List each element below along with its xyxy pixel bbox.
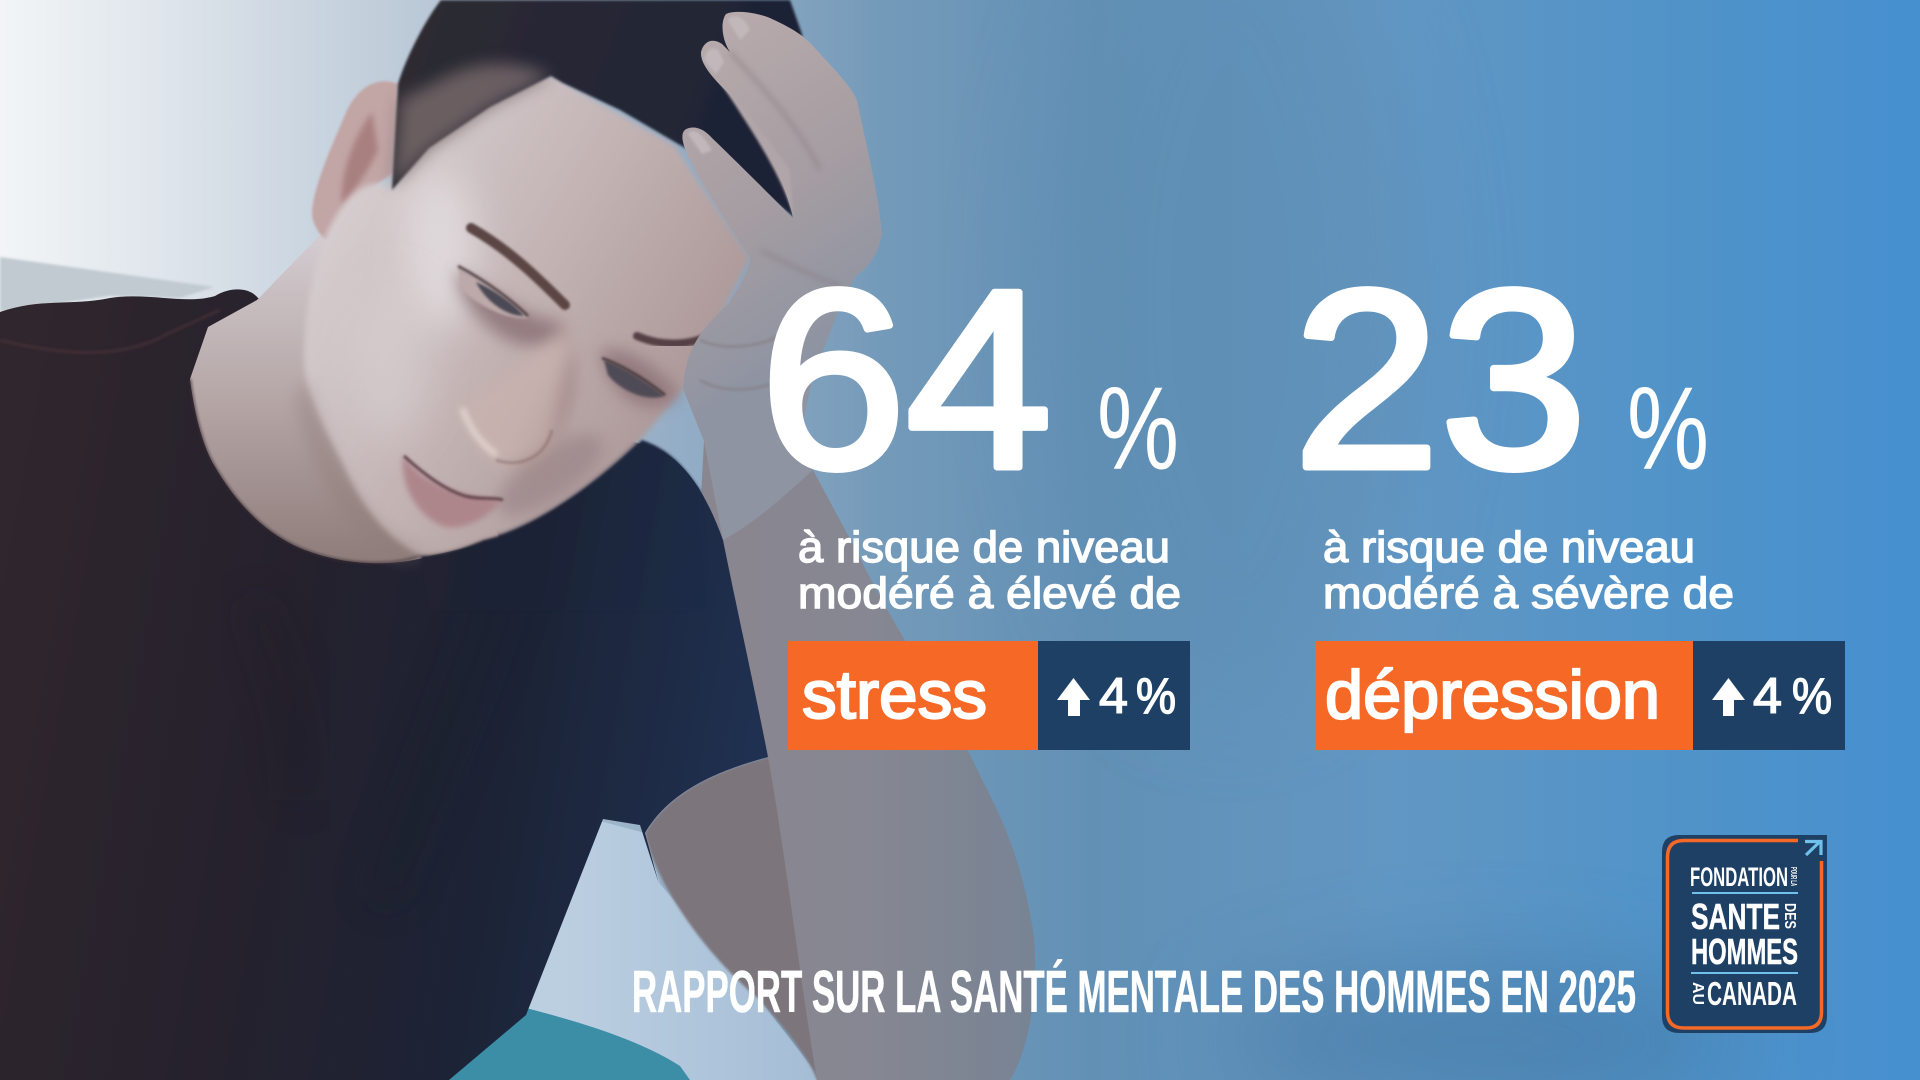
stat: 23 % depression (1293, 237, 1845, 750)
logo: Fondation pour la santé des hommes au Canada: POUR LA (1789, 867, 1798, 886)
t-shirt (0, 289, 768, 1080)
hair (392, 0, 802, 222)
logo: Fondation pour la santé des hommes au Canada: CANADA (1707, 975, 1797, 1012)
logo: Fondation pour la santé des hommes au Canada (1662, 835, 1827, 1033)
nose highlight (462, 322, 568, 464)
teal object (449, 1008, 690, 1080)
logo: Fondation pour la santé des hommes au Canada: FONDATION (1690, 862, 1788, 892)
logo: Fondation pour la santé des hommes au Canada: DES (1781, 903, 1798, 929)
upper arm (645, 757, 870, 1080)
figure 64: 64 (760, 237, 1052, 521)
eyes (458, 268, 528, 318)
eyebrows (471, 228, 565, 305)
logo: Fondation pour la santé des hommes au Canada: SANTE (1691, 896, 1780, 937)
stat: 64 % stress (760, 237, 1190, 750)
neck (190, 234, 500, 563)
hand (682, 12, 882, 540)
window gap beside the torso (449, 820, 822, 1080)
description: à risque de niveau (1323, 523, 1695, 572)
lips (403, 455, 502, 527)
stress increase (1038, 641, 1190, 750)
face (304, 76, 750, 555)
stress label (788, 641, 1038, 750)
photo: man holding his head (0, 0, 1035, 1080)
stress increase: % (1136, 668, 1176, 724)
description: modéré à élevé de (798, 569, 1181, 618)
description: à risque de niveau (798, 523, 1170, 572)
logo: Fondation pour la santé des hommes au Canada: AU (1689, 982, 1706, 1005)
shoulder over the jaw (421, 440, 710, 610)
eye sockets and nose shadow (455, 270, 566, 346)
skin at lower left (0, 1064, 105, 1080)
stress increase: 4 (1099, 668, 1128, 724)
ear (312, 81, 398, 240)
description: modéré à sévère de (1323, 569, 1734, 618)
depression label (1315, 641, 1693, 750)
figure 23: 23 (1293, 237, 1587, 521)
stress label: stress (802, 657, 987, 733)
fingernails (688, 16, 750, 154)
depression increase: 4 (1753, 668, 1782, 724)
forearm (690, 437, 1035, 1080)
depression label: dépression (1325, 657, 1660, 733)
depression increase: % (1792, 668, 1832, 724)
percent sign: % (1627, 363, 1709, 495)
logo: Fondation pour la santé des hommes au Canada: HOMMES (1691, 931, 1798, 972)
depression increase (1693, 641, 1845, 750)
percent sign: % (1097, 363, 1179, 495)
